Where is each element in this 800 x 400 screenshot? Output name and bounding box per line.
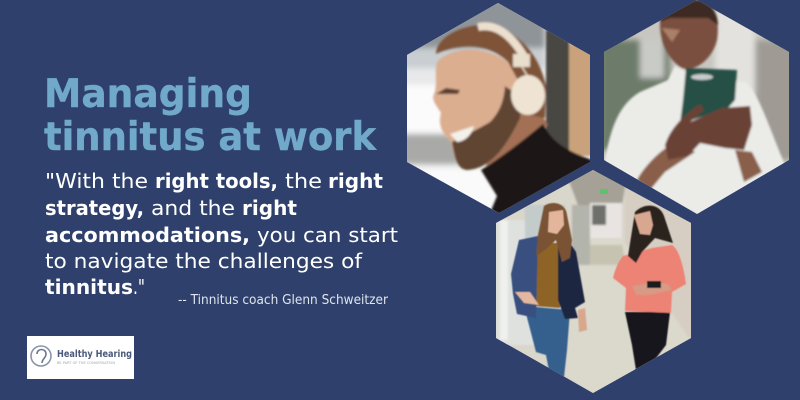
headphone cup bbox=[511, 75, 545, 115]
quote: the bbox=[285, 169, 322, 193]
logo tagline: BE PART OF THE CONVERSATION bbox=[57, 361, 115, 365]
icon: ear speech bubble bbox=[31, 346, 51, 366]
smile bbox=[450, 126, 474, 142]
logo bbox=[27, 336, 134, 379]
quote: right tools, bbox=[155, 169, 278, 193]
title bbox=[44, 72, 377, 160]
quote: and the bbox=[151, 196, 235, 220]
quote: tinnitus bbox=[45, 275, 133, 299]
woman 2: face bbox=[634, 211, 653, 235]
quote: ." bbox=[133, 275, 145, 299]
woman 1: face bbox=[548, 210, 564, 234]
woman 2: hands bbox=[632, 282, 672, 295]
phone bbox=[680, 68, 737, 124]
woman 2: sweater bbox=[613, 245, 686, 313]
attribution: -- Tinnitus coach Glenn Schweitzer bbox=[178, 293, 389, 308]
turtleneck bbox=[481, 124, 592, 215]
quote: to navigate the challenges of bbox=[45, 249, 363, 273]
woman 2: hair bbox=[628, 206, 673, 263]
forearm bbox=[636, 148, 696, 188]
title: tinnitus at work bbox=[44, 115, 377, 160]
hands bbox=[665, 104, 752, 160]
woman 1: hand bbox=[515, 292, 539, 305]
hair bbox=[436, 25, 546, 118]
quote: strategy, bbox=[45, 196, 144, 220]
woman 1: blazer bbox=[511, 236, 538, 318]
photo: man with headphones bbox=[400, 0, 595, 218]
eye and brow bbox=[436, 88, 460, 94]
headphone band bbox=[478, 26, 526, 60]
woman 1: jeans bbox=[524, 306, 570, 377]
quote: you can start bbox=[257, 223, 398, 247]
exit sign bbox=[600, 189, 608, 194]
quote: accommodations, bbox=[45, 223, 250, 247]
title: Managing bbox=[44, 72, 252, 117]
quote: right bbox=[328, 169, 383, 193]
woman 2: trousers bbox=[625, 312, 670, 370]
logo text: Healthy Hearing bbox=[57, 349, 132, 360]
head bbox=[658, 16, 720, 70]
neck bbox=[485, 112, 549, 168]
photo: two women walking bbox=[490, 165, 695, 400]
beard bbox=[452, 86, 520, 170]
face bbox=[433, 50, 521, 170]
shirt bbox=[604, 66, 785, 216]
woman 1: hair bbox=[536, 203, 572, 262]
quote: "With the bbox=[45, 169, 148, 193]
woman 1: top bbox=[536, 242, 561, 309]
quote: right bbox=[242, 196, 297, 220]
photo: woman with phone bbox=[600, 0, 795, 216]
quote bbox=[45, 169, 398, 299]
